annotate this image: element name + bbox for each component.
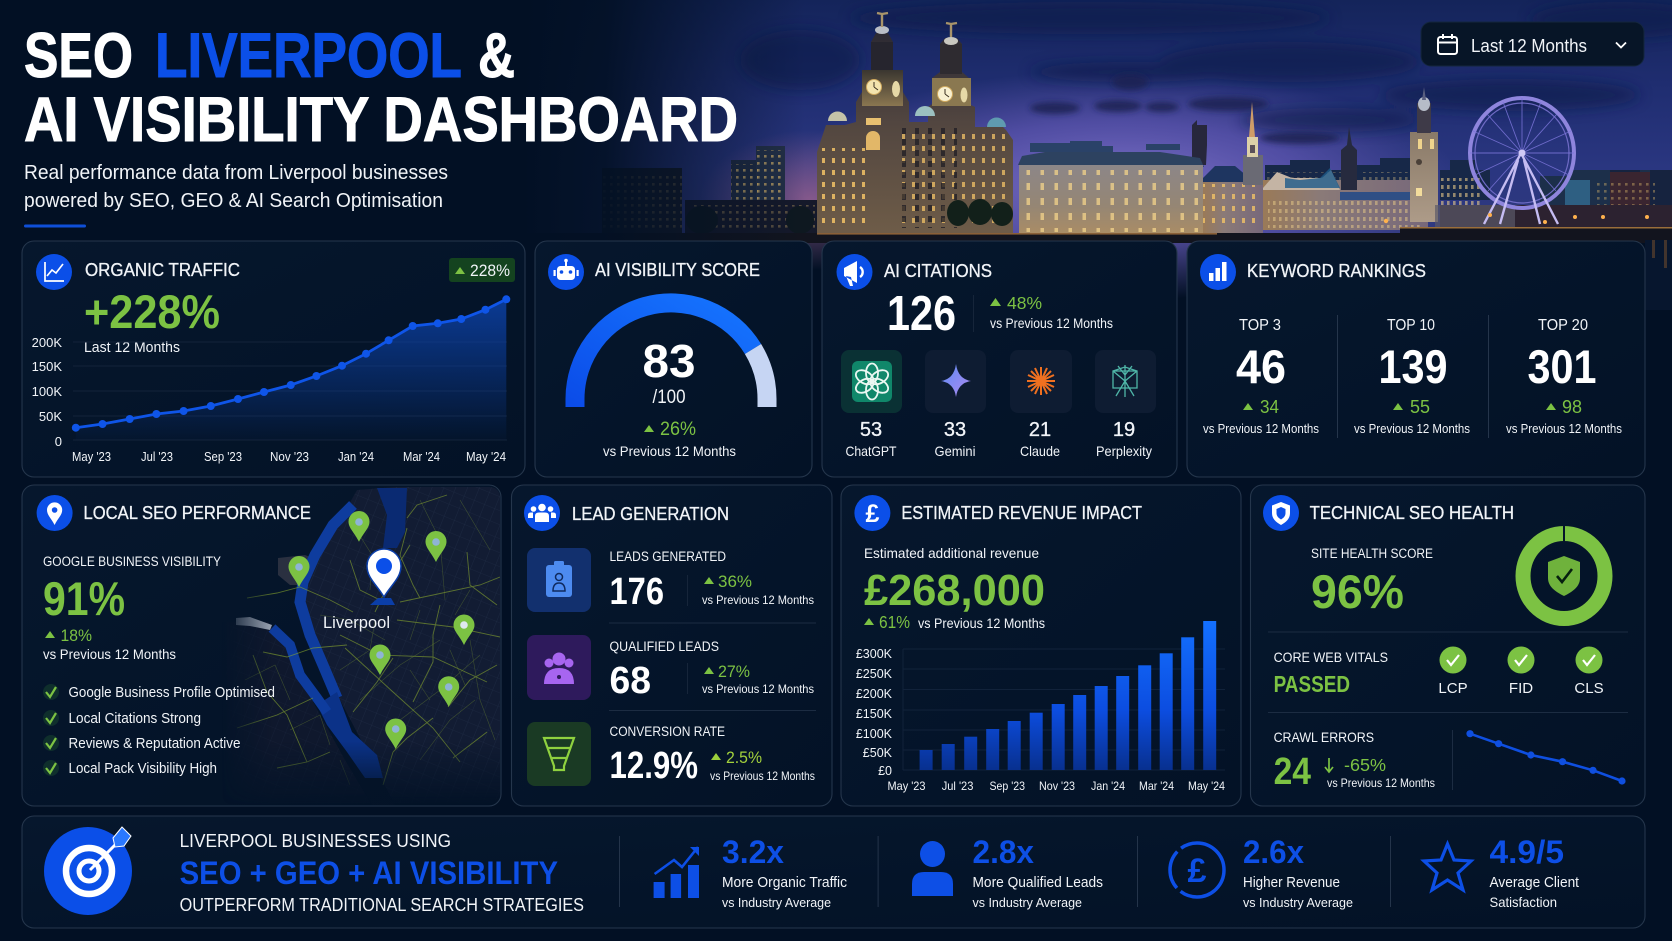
core web vitals xyxy=(1274,646,1604,697)
Google Business visibility: vs Previous 12 Months xyxy=(43,646,176,662)
column: top 20: 98 xyxy=(1562,397,1582,417)
metric: qualified leads: vs Previous 12 Months xyxy=(702,682,814,696)
tile: Claude xyxy=(1010,350,1072,459)
heading: ORGANIC TRAFFIC xyxy=(85,260,240,280)
Cunard building xyxy=(1018,152,1204,233)
icon: people xyxy=(524,495,560,531)
change: vs Previous 12 Months xyxy=(990,316,1113,331)
line chart: traffic: 0 xyxy=(55,434,62,449)
core web vitals: FID xyxy=(1509,680,1533,697)
icon: calendar xyxy=(1438,34,1457,54)
heading: TECHNICAL SEO HEALTH xyxy=(1310,503,1514,523)
line chart: traffic: May '24 xyxy=(466,450,506,464)
Clock tower xyxy=(1410,87,1438,222)
map pins xyxy=(288,511,474,749)
bar chart: revenue: £50K xyxy=(863,746,893,760)
heading: AI VISIBILITY SCORE xyxy=(595,260,760,280)
icon: star xyxy=(1424,844,1471,890)
line chart: traffic: 150K xyxy=(32,359,62,374)
bar chart: revenue: May '23 xyxy=(888,779,926,793)
checklist: Local Pack Visibility High xyxy=(68,761,217,777)
column: top 10 xyxy=(1354,317,1470,436)
metric: conversion rate: 12.9% xyxy=(610,745,698,787)
title accent line xyxy=(24,224,86,228)
stat: revenue: vs Industry Average xyxy=(1243,895,1353,910)
stat: client satisfaction xyxy=(1424,834,1579,910)
Left distant towers xyxy=(602,168,682,240)
panel: local SEO performance xyxy=(22,485,501,806)
stat: qualified leads: 2.8x xyxy=(972,834,1034,870)
metric: leads generated: vs Previous 12 Months xyxy=(702,593,814,607)
Port of Liverpool building and waterfront range xyxy=(1203,102,1428,233)
right-hand brick buildings xyxy=(1540,170,1650,215)
crawl errors: -65% xyxy=(1344,755,1386,775)
icon: growth bars xyxy=(654,847,699,898)
tile: Gemini: Gemini xyxy=(934,443,976,459)
stat: organic traffic: 3.2x xyxy=(722,834,784,870)
line chart: traffic: 50K xyxy=(39,409,62,424)
icon: funnel xyxy=(544,738,574,770)
stat: qualified leads: More Qualified Leads xyxy=(972,875,1103,891)
change xyxy=(864,612,1045,632)
icon: ChatGPT knot xyxy=(853,364,891,400)
change: vs Previous 12 Months xyxy=(918,615,1045,631)
stat: revenue: 2.6x xyxy=(1243,834,1304,870)
icon: robot xyxy=(548,254,584,290)
subtitle: powered by SEO, GEO & AI Search Optimisation xyxy=(24,189,443,212)
line chart: traffic: 200K xyxy=(32,335,62,350)
metric: conversion rate: CONVERSION RATE xyxy=(610,724,725,739)
arrow down xyxy=(1325,758,1333,772)
panel: summary banner xyxy=(22,816,1645,928)
line chart: traffic xyxy=(32,295,510,464)
panel: organic traffic xyxy=(22,241,525,477)
subtitle xyxy=(24,161,448,212)
line chart: traffic: May '23 xyxy=(72,450,111,464)
bar chart: revenue: May '24 xyxy=(1188,779,1225,793)
bar chart: revenue: Sep '23 xyxy=(990,779,1025,793)
column: top 3: 34 xyxy=(1260,397,1279,417)
growth badge: 228% xyxy=(470,262,510,280)
Liverpool big wheel xyxy=(1470,98,1574,224)
title: SEO xyxy=(24,21,133,91)
subtitle: Real performance data from Liverpool businesses xyxy=(24,161,448,184)
tile: Claude: 21 xyxy=(1029,419,1051,441)
Google Business visibility: 91% xyxy=(43,572,125,625)
column: top 10: 55 xyxy=(1410,397,1430,417)
Royal Liver Building xyxy=(817,13,1013,233)
bar chart: revenue: £150K xyxy=(856,707,893,721)
bar chart: revenue: Nov '23 xyxy=(1039,779,1075,793)
bar chart: revenue: £250K xyxy=(856,667,893,681)
metric: leads generated: 176 xyxy=(610,571,664,613)
change xyxy=(990,293,1113,331)
bar chart: revenue: £0 xyxy=(878,764,892,778)
trees xyxy=(686,206,718,234)
core web vitals: PASSED xyxy=(1274,671,1350,697)
checklist: Local Citations Strong xyxy=(68,711,201,727)
bar chart: revenue: £300K xyxy=(856,647,893,661)
crawl errors: vs Previous 12 Months xyxy=(1327,776,1435,790)
Gothic dark tower xyxy=(1341,127,1357,190)
left fade into page background xyxy=(520,0,805,245)
gauge xyxy=(575,303,767,407)
metric: qualified leads: QUALIFIED LEADS xyxy=(610,639,719,654)
icon: audience xyxy=(544,652,574,684)
line chart: traffic: Jan '24 xyxy=(338,450,374,464)
Google Business visibility xyxy=(43,554,221,662)
stat: client satisfaction: Satisfaction xyxy=(1490,894,1557,910)
icon: bars xyxy=(1200,254,1236,290)
stat: client satisfaction: 4.9/5 xyxy=(1490,834,1564,870)
tile: ChatGPT xyxy=(841,350,902,459)
change xyxy=(644,419,696,440)
title: LIVERPOOL xyxy=(155,21,462,91)
line chart: traffic: Nov '23 xyxy=(270,450,309,464)
line chart: traffic: 100K xyxy=(32,384,62,399)
tile: Claude: Claude xyxy=(1020,443,1060,459)
metric: qualified leads xyxy=(527,635,814,702)
panel: lead generation xyxy=(512,485,832,806)
map of Liverpool xyxy=(236,487,500,785)
bar chart: revenue: £100K xyxy=(856,727,893,741)
big stat: +228% xyxy=(84,285,220,338)
column: top 3: TOP 3 xyxy=(1239,317,1281,334)
column: top 3: 46 xyxy=(1236,340,1286,393)
score: 83 xyxy=(642,335,696,387)
metric: qualified leads: 27% xyxy=(718,662,750,681)
banner text xyxy=(180,831,584,915)
panel: estimated revenue impact xyxy=(841,485,1241,806)
metric: leads generated: LEADS GENERATED xyxy=(610,549,726,564)
stat: qualified leads: vs Industry Average xyxy=(972,895,1082,910)
column: top 10: 139 xyxy=(1378,340,1448,393)
bar chart: revenue xyxy=(856,621,1225,793)
tile: Gemini xyxy=(925,350,986,459)
crawl errors: 24 xyxy=(1274,751,1311,793)
heading: KEYWORD RANKINGS xyxy=(1247,261,1426,281)
line chart: traffic: Jul '23 xyxy=(141,450,173,464)
icon: shield check xyxy=(1548,556,1580,596)
heading: LOCAL SEO PERFORMANCE xyxy=(84,503,311,523)
tile: ChatGPT: 53 xyxy=(860,419,882,441)
site health score xyxy=(1311,546,1433,618)
checklist: Reviews & Reputation Active xyxy=(68,736,240,752)
core web vitals: CORE WEB VITALS xyxy=(1274,649,1388,665)
crawl errors xyxy=(1274,729,1626,793)
title: & xyxy=(478,21,515,91)
stat: client satisfaction: Average Client xyxy=(1490,875,1579,891)
title xyxy=(24,21,738,155)
core web vitals: LCP xyxy=(1438,680,1468,697)
quay, lamps and water xyxy=(520,228,1672,243)
background dark blocks xyxy=(1265,158,1490,200)
stat: qualified leads xyxy=(912,834,1103,910)
map label: Liverpool xyxy=(323,613,390,632)
panel: technical SEO health xyxy=(1250,485,1645,806)
banner text: SEO + GEO + AI VISIBILITY xyxy=(180,855,558,891)
column: top 20: 301 xyxy=(1528,340,1596,393)
core web vitals: CLS xyxy=(1574,680,1604,697)
panel: AI visibility score: /100 xyxy=(652,387,686,408)
icon: line chart xyxy=(36,254,72,290)
heading: ESTIMATED REVENUE IMPACT xyxy=(901,503,1142,523)
icon: clipboard xyxy=(546,561,572,597)
icon: pin xyxy=(37,495,73,531)
checklist: Google Business Profile Optimised xyxy=(68,685,275,701)
stat: revenue xyxy=(1170,834,1353,910)
Google Business visibility: GOOGLE BUSINESS VISIBILITY xyxy=(43,554,221,569)
change: 26% xyxy=(660,419,696,440)
total citations: 126 xyxy=(887,287,956,341)
icon: target with arrow xyxy=(44,827,132,915)
heading: AI CITATIONS xyxy=(884,261,992,281)
stat: revenue: Higher Revenue xyxy=(1243,875,1340,891)
site health score: 96% xyxy=(1311,565,1404,618)
pin: Liverpool xyxy=(367,549,401,605)
heading: LEAD GENERATION xyxy=(572,504,729,524)
donut: health xyxy=(1523,525,1605,618)
metric: conversion rate: vs Previous 12 Months xyxy=(710,769,815,783)
Google Business visibility: 18% xyxy=(60,626,92,645)
caption: Last 12 Months xyxy=(84,339,180,356)
banner text: OUTPERFORM TRADITIONAL SEARCH STRATEGIES xyxy=(180,895,584,915)
column: top 10: vs Previous 12 Months xyxy=(1354,422,1470,436)
column: top 3: vs Previous 12 Months xyxy=(1203,422,1319,436)
hero: Liverpool waterfront skyline at dusk xyxy=(520,0,1672,310)
chevron xyxy=(1616,42,1626,48)
tile: Perplexity: Perplexity xyxy=(1096,443,1152,459)
panel: keyword rankings xyxy=(1187,241,1645,477)
checklist xyxy=(43,684,275,777)
stat: organic traffic: More Organic Traffic xyxy=(722,875,847,891)
panel: AI citations xyxy=(822,241,1177,477)
crawl errors: CRAWL ERRORS xyxy=(1274,729,1374,745)
change: 48% xyxy=(1007,293,1042,313)
metric: qualified leads: 68 xyxy=(610,660,651,702)
site health score: SITE HEALTH SCORE xyxy=(1311,546,1433,561)
icon: pound xyxy=(854,495,890,531)
icon: pound coin xyxy=(1170,843,1224,897)
date range selector xyxy=(1421,22,1644,66)
metric: leads generated xyxy=(527,548,814,613)
metric: conversion rate: 2.5% xyxy=(726,748,762,767)
line chart: traffic: Sep '23 xyxy=(204,450,242,464)
date range selector: Last 12 Months xyxy=(1471,36,1587,56)
bar chart: revenue: Mar '24 xyxy=(1139,779,1174,793)
column: top 20 xyxy=(1506,317,1622,436)
icon: pound: £ xyxy=(865,500,879,528)
tile: Gemini: 33 xyxy=(944,419,966,441)
column: top 20: vs Previous 12 Months xyxy=(1506,422,1622,436)
sparkline: crawl errors xyxy=(1466,730,1626,785)
panel: AI visibility score xyxy=(535,241,812,477)
Mann Island building back block xyxy=(1030,141,1180,152)
bar chart: revenue: Jul '23 xyxy=(942,779,974,793)
revenue figure: £268,000 xyxy=(864,566,1045,615)
column: top 10: TOP 10 xyxy=(1387,317,1435,334)
bar chart: revenue: Jan '24 xyxy=(1091,779,1125,793)
icon: pound coin: £ xyxy=(1188,852,1207,890)
tile: Perplexity xyxy=(1095,350,1156,459)
trees by Liver Building xyxy=(947,199,1013,226)
bar chart: revenue: £200K xyxy=(856,687,893,701)
change: 61% xyxy=(879,612,910,632)
caption: Estimated additional revenue xyxy=(864,545,1039,561)
growth badge xyxy=(449,258,515,282)
stat: organic traffic: vs Industry Average xyxy=(722,895,831,910)
icon: shield xyxy=(1263,495,1299,531)
column: top 3 xyxy=(1203,317,1319,436)
tile: ChatGPT: ChatGPT xyxy=(846,443,897,459)
line chart: traffic: Mar '24 xyxy=(403,450,440,464)
metric: leads generated: 36% xyxy=(718,572,752,591)
banner text: LIVERPOOL BUSINESSES USING xyxy=(180,831,451,851)
stat: organic traffic xyxy=(654,834,847,910)
column: top 20: TOP 20 xyxy=(1538,317,1588,334)
tile: Perplexity: 19 xyxy=(1113,419,1135,441)
panel: AI visibility score: vs Previous 12 Months xyxy=(603,443,736,459)
title: AI VISIBILITY DASHBOARD xyxy=(24,85,738,155)
metric: conversion rate xyxy=(527,722,815,787)
icon: megaphone xyxy=(836,254,872,290)
icon: person xyxy=(912,841,953,896)
